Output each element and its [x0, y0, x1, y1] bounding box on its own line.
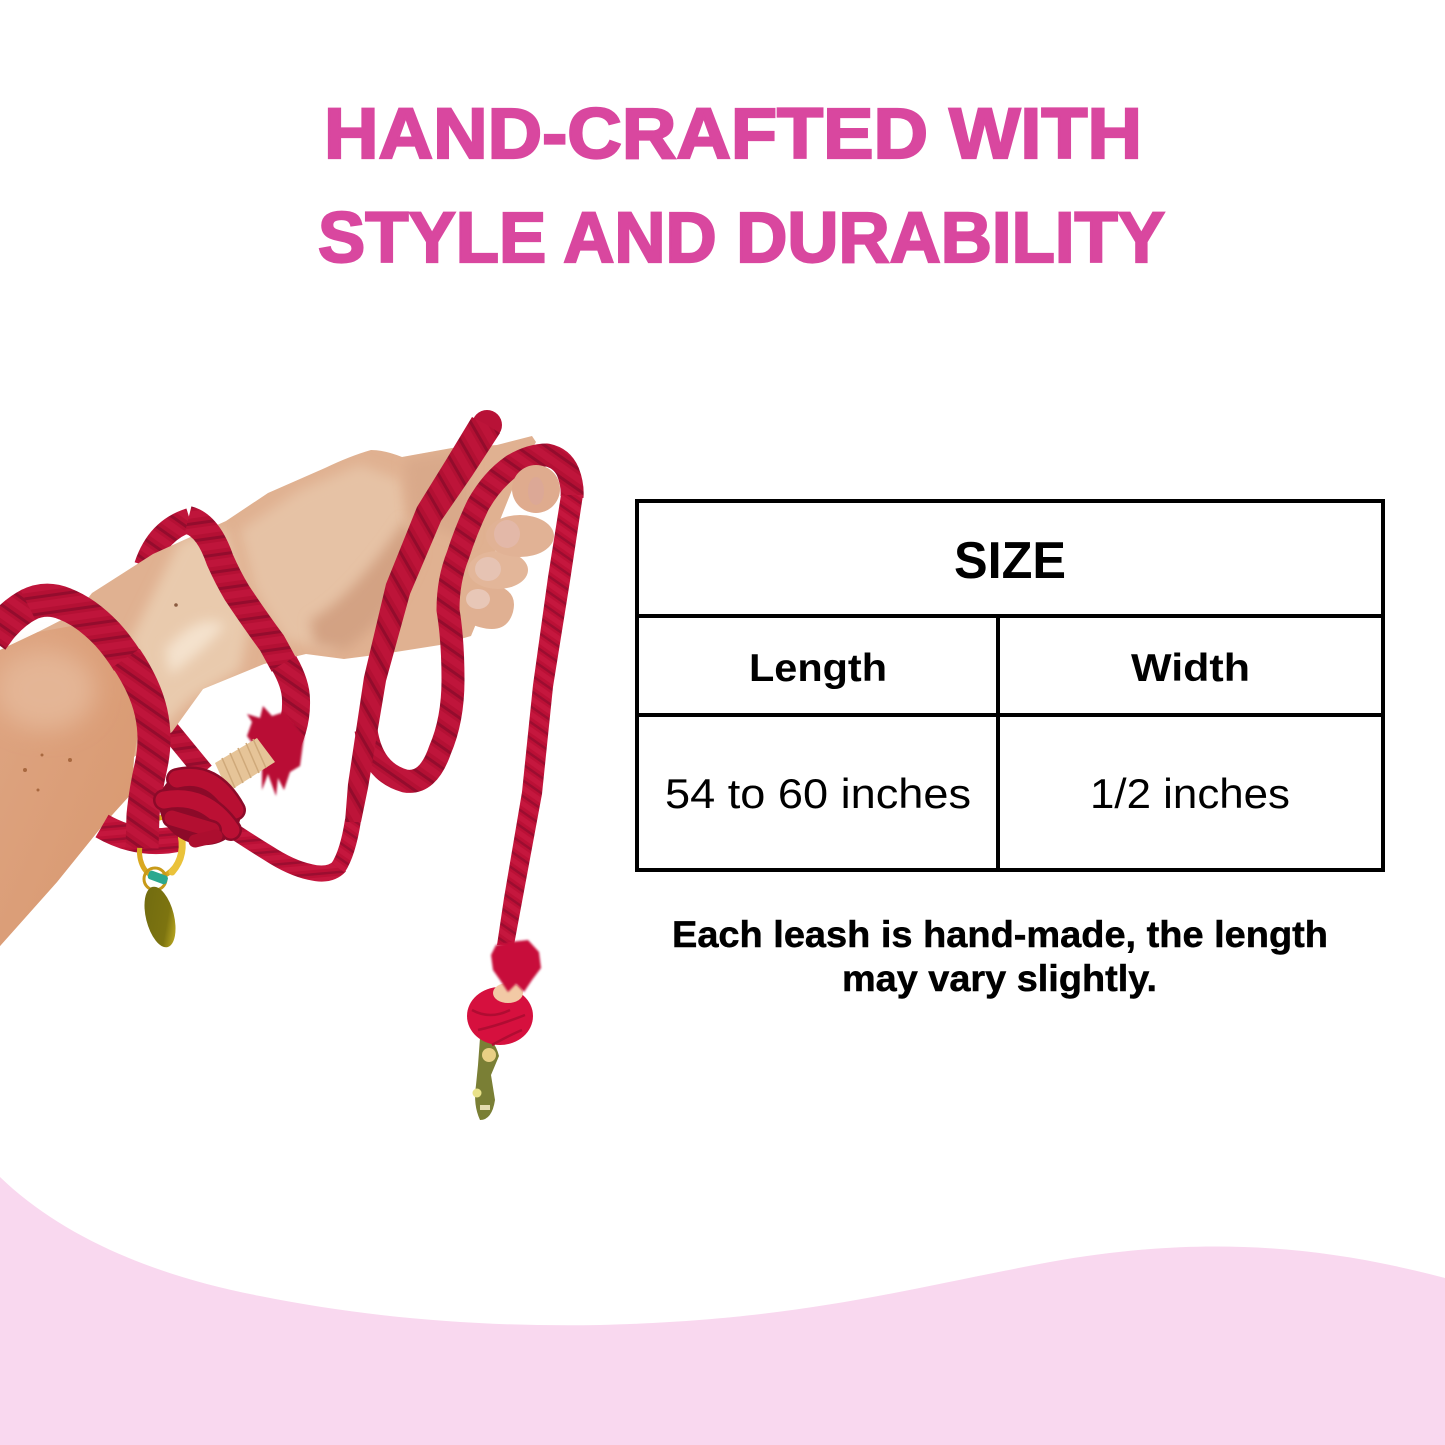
size table	[637, 501, 1383, 870]
rope: front wrap around forearm	[0, 600, 154, 848]
rope: lower strand under the forearm	[102, 826, 182, 841]
note text	[672, 914, 1328, 999]
photo: hand holding red rope leash	[0, 410, 583, 1120]
table heading: size: SIZE	[954, 532, 1066, 590]
hand and forearm	[0, 420, 540, 950]
rope: main strand rising to the hand	[205, 410, 502, 874]
tan wrapped binding	[215, 738, 275, 792]
rope: wrapped around wrist	[188, 520, 296, 758]
note text: may vary slightly.	[842, 958, 1157, 999]
rope: passes behind the wrist	[146, 520, 204, 772]
tuft above lower knot	[491, 940, 541, 992]
foreground forearm	[0, 625, 140, 946]
lower rope knot	[467, 987, 533, 1045]
note text: Each leash is hand-made, the length	[672, 914, 1328, 955]
frayed rope end	[247, 706, 304, 796]
column heading: length: Length	[749, 647, 887, 690]
title: STYLE AND DURABILITY	[318, 199, 1165, 278]
length value: 54 to 60 inches	[665, 770, 971, 817]
brass snap hook	[472, 1038, 499, 1120]
gold ring and brass tag	[134, 813, 188, 950]
fingernails	[466, 477, 544, 609]
decorative pink wave	[0, 1177, 1445, 1445]
rope knot near collar	[147, 758, 253, 858]
rope: leash loop held in hand	[366, 455, 572, 781]
title	[318, 95, 1165, 278]
width value: 1/2 inches	[1090, 770, 1290, 817]
fingers gripping the rope	[466, 465, 560, 629]
tan binding at lower knot	[493, 983, 523, 1003]
title: HAND-CRAFTED WITH	[324, 95, 1142, 174]
column heading: width: Width	[1131, 647, 1250, 690]
rope: long strand hanging to the snap	[497, 495, 583, 945]
table grid	[637, 501, 1383, 870]
